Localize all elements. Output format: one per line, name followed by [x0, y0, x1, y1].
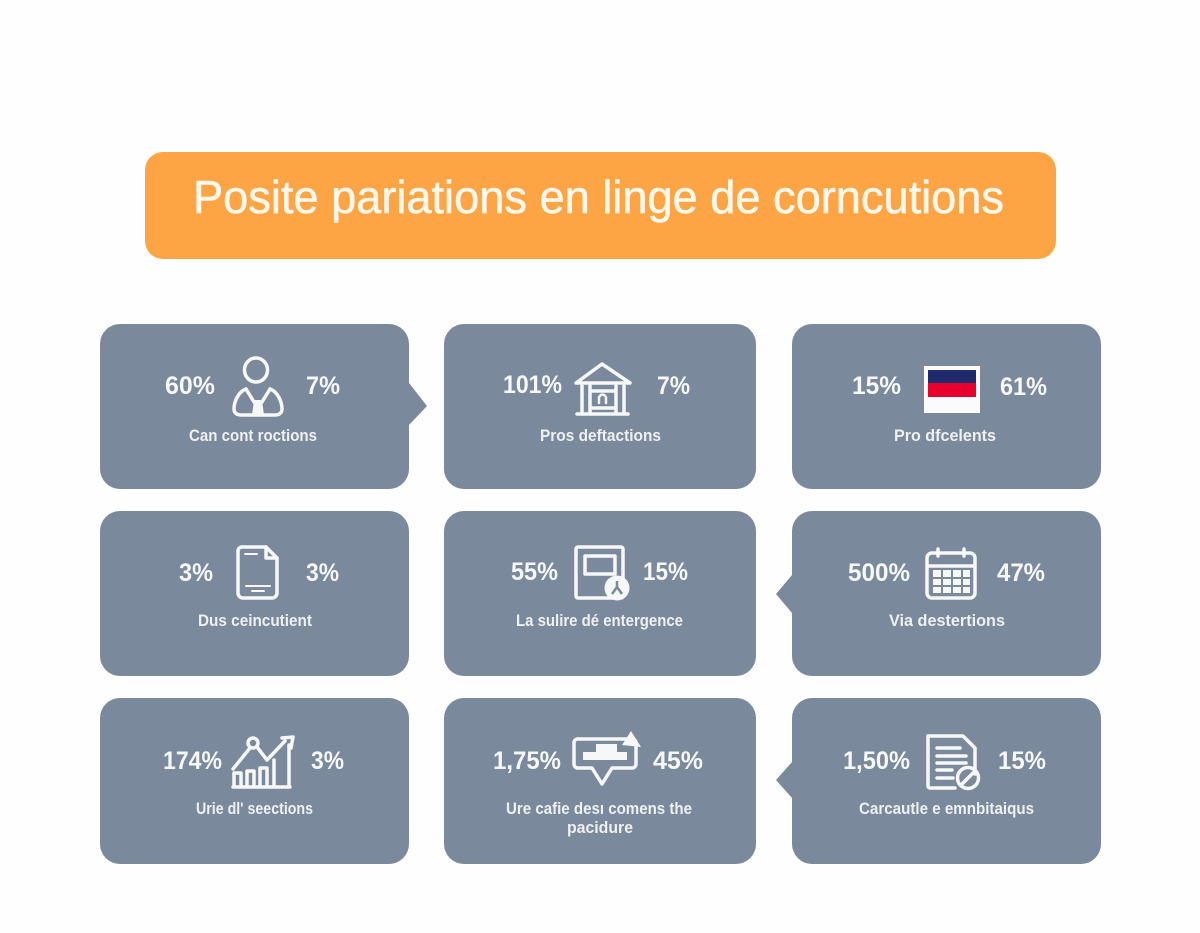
panel: carcautle e embitaiqus: 15%: [998, 747, 1046, 775]
panel: ure cafie: 1,75%: [493, 747, 561, 775]
panel: carcautle e embitaiqus: Carcautle e emnbitaiqus: [859, 799, 1034, 818]
icon: person: [234, 358, 282, 415]
panel: ure cafie: 45%: [653, 747, 703, 775]
icon: speech bubble with truck: [574, 731, 641, 784]
panel: pro dfcelents: [792, 324, 1101, 489]
panel: pro dfcelents: 61%: [1000, 373, 1047, 401]
panel: pros deftactions: [444, 324, 756, 489]
panel: carcautle e embitaiqus: 1,50%: [843, 747, 910, 775]
icon: calendar: [927, 549, 975, 598]
panel: ure cafie: [444, 698, 756, 864]
panel: can cont roctions: 60%: [165, 372, 215, 400]
panel: urie dl sections: 174%: [163, 747, 222, 775]
title: Posite pariations en linge de corncutions: [193, 171, 1004, 223]
icon: document: [238, 547, 277, 598]
panel: la sulire de entergence: 15%: [643, 558, 688, 586]
panel: urie dl sections: [100, 698, 409, 864]
panel: la sulire de entergence: La sulire dé entergence: [516, 611, 683, 630]
icon: growth chart: [233, 737, 293, 787]
icon: flag: [924, 366, 980, 413]
label text: Ure cafie desı comens the: [506, 799, 692, 818]
panel: dus ceincutient: Dus ceincutient: [198, 611, 312, 630]
label text: [506, 799, 692, 837]
panel: dus ceincutient: [100, 511, 409, 676]
panel: la sulire de entergence: 55%: [511, 558, 558, 586]
panel: can cont roctions: [100, 324, 427, 489]
icon: document with stamp: [928, 736, 978, 788]
label text: pacidure: [567, 818, 633, 837]
panel: via destertions: 47%: [997, 559, 1045, 587]
icon: screen with badge: [576, 547, 630, 600]
icon: bank building: [576, 364, 630, 414]
panel: via destertions: 500%: [848, 559, 910, 587]
panel: via destertions: Via destertions: [889, 611, 1005, 630]
panel: pro dfcelents: Pro dfcelents: [894, 426, 996, 445]
panel: la sulire de entergence: [444, 511, 756, 676]
title banner: [145, 152, 1056, 259]
panel: pros deftactions: 7%: [657, 372, 690, 400]
panel: pros deftactions: 101%: [503, 371, 562, 399]
panel: dus ceincutient: 3%: [179, 559, 213, 587]
panel: pro dfcelents: 15%: [852, 372, 901, 400]
panel: pros deftactions: Pros deftactions: [540, 426, 661, 445]
panel: dus ceincutient: 3%: [306, 559, 339, 587]
panel: urie dl sections: Urie dl' seections: [196, 799, 313, 818]
panel: urie dl sections: 3%: [311, 747, 344, 775]
panel: can cont roctions: 7%: [306, 372, 340, 400]
panel: via destertions: [776, 511, 1101, 676]
panel: can cont roctions: Can cont roctions: [189, 426, 317, 445]
panel: carcautle e embitaiqus: [776, 698, 1101, 864]
